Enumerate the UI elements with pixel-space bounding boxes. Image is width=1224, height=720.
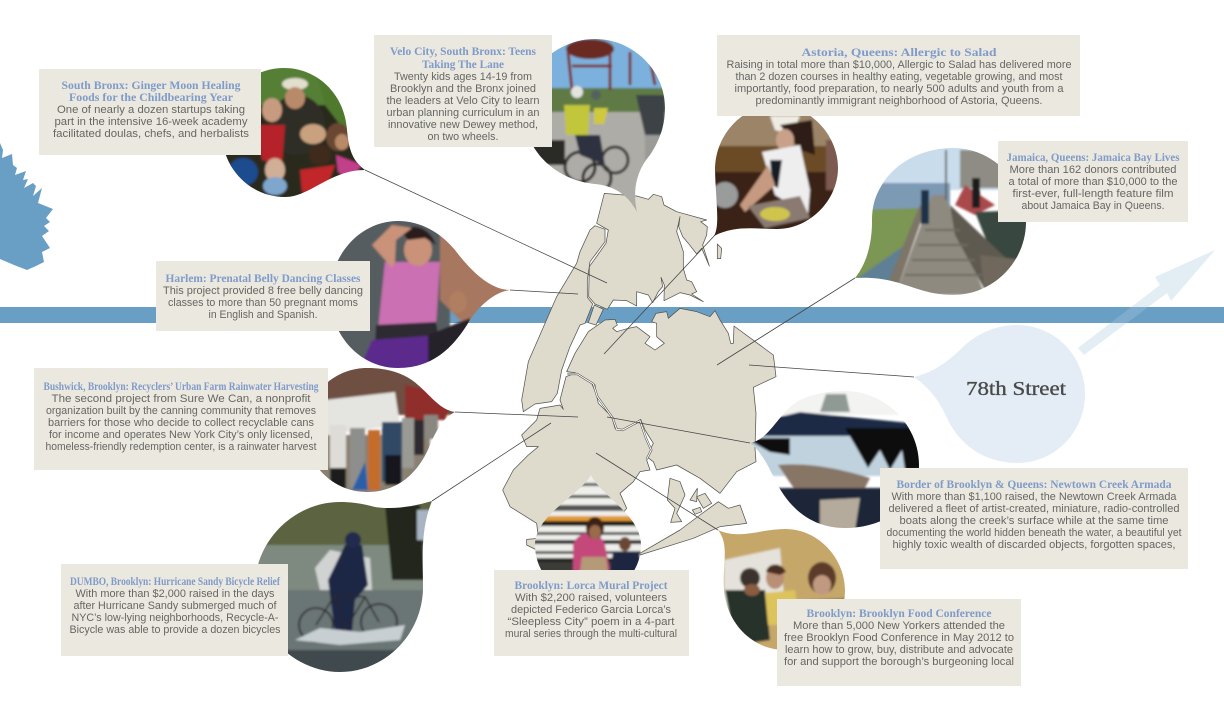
body: Newtown Creek xyxy=(886,491,1182,551)
body: DUMBO: after Hurricane Sandy submerged much of xyxy=(74,600,277,612)
panel: Food Conference xyxy=(715,525,1021,686)
body: Velo City: innovative new Dewey method, xyxy=(388,119,538,131)
heading: Harlem: Harlem: Prenatal Belly Dancing Classes xyxy=(166,273,361,285)
body: Bushwick: for income and operates New York City’s only licensed, xyxy=(49,429,313,441)
heading: Bushwick: Bushwick, Brooklyn: Recyclers’ Urban Farm Rainwater Harvesting xyxy=(44,381,319,393)
body: DUMBO xyxy=(70,588,281,636)
text box: South Bronx xyxy=(39,69,261,155)
body: Jamaica: about Jamaica Bay in Queens. xyxy=(1022,200,1164,212)
panel: Lorca xyxy=(494,470,689,656)
borough: Bronx xyxy=(589,193,709,309)
connector lines xyxy=(365,170,914,530)
body: DUMBO: NYC’s low-lying neighborhoods, Recycle-A- xyxy=(72,612,279,624)
body: Astoria: than 2 dozen courses in healthy eating, vegetable growing, and most xyxy=(736,71,1062,83)
body: Velo City: on two wheels. xyxy=(428,131,498,143)
body: Lorca: “Sleepless City” poem in a 4-part xyxy=(508,616,674,628)
body: Astoria: predominantly immigrant neighborhood of Astoria, Queens. xyxy=(756,95,1042,107)
body: DUMBO: With more than $2,000 raised in the days xyxy=(76,588,275,600)
body: Lorca xyxy=(505,592,677,640)
arrow pointing north-east xyxy=(1078,250,1215,355)
body: Food Conference: for and support the borough’s burgeoning local xyxy=(784,656,1014,668)
callout: 78th Street: 78th Street xyxy=(966,378,1066,400)
body: Food Conference: free Brooklyn Food Conference in May 2012 to xyxy=(784,632,1014,644)
panel: Harlem xyxy=(156,215,515,375)
heading: Food Conference: Brooklyn: Brooklyn Food Conference xyxy=(806,608,992,620)
photo: Brooklyn Food Conference xyxy=(718,529,845,650)
Newtown Creek channel xyxy=(567,374,651,459)
body: Harlem: This project provided 8 free belly dancing xyxy=(163,285,363,297)
heading: South Bronx: South Bronx: Ginger Moon Healing xyxy=(62,80,241,92)
body: South Bronx: One of nearly a dozen startups taking xyxy=(57,104,245,116)
heading: Velo City xyxy=(390,46,537,71)
body: Newtown Creek: delivered a fleet of artist-created, miniature, radio-controlled xyxy=(888,503,1180,515)
heading: Velo City: Velo City, South Bronx: Teens xyxy=(390,46,537,58)
borough: Queens xyxy=(567,308,776,493)
borough: Manhattan xyxy=(522,226,605,412)
photo: DUMBO cyclist in flood xyxy=(258,501,432,672)
heading: Astoria: Astoria, Queens: Allergic to Salad xyxy=(802,47,997,59)
photo: South Bronx group xyxy=(226,68,365,197)
text box: Lorca xyxy=(494,570,689,656)
text box: Velo City xyxy=(374,35,552,147)
body: Bushwick: homeless-friendly redemption center, is a rainwater harvest xyxy=(46,441,316,453)
photo: Velo City cyclists xyxy=(534,39,665,212)
heading: DUMBO: DUMBO, Brooklyn: Hurricane Sandy Bicycle Relief xyxy=(70,576,280,588)
text box: Jamaica xyxy=(998,141,1188,222)
body: Newtown Creek: documenting the world hidden beneath the water, a beautiful yet xyxy=(886,527,1182,539)
text box: Food Conference xyxy=(777,599,1021,686)
text box: Harlem xyxy=(156,261,370,331)
text box: Bushwick xyxy=(34,368,328,470)
photo: Harlem belly dancing xyxy=(338,221,510,368)
body: Astoria: Raising in total more than $10,000, Allergic to Salad has delivered more xyxy=(726,59,1072,71)
body: Velo City xyxy=(386,71,540,143)
text box: DUMBO xyxy=(61,564,288,656)
body: Newtown Creek: boats along the creek’s surface while at the same time xyxy=(900,515,1168,527)
body: Harlem: classes to more than 50 pregnant moms xyxy=(168,297,359,309)
body: Newtown Creek: highly toxic wealth of discarded objects, forgotten spaces, xyxy=(892,539,1176,551)
body: Harlem: in English and Spanish. xyxy=(208,309,318,321)
body: Velo City: the leaders at Velo City to learn xyxy=(386,95,540,107)
body: Velo City: Twenty kids ages 14-19 from xyxy=(394,71,532,83)
Jamaica Bay islands xyxy=(667,244,722,522)
body: Lorca: mural series through the multi-cultural xyxy=(505,628,677,640)
panel: Velo City xyxy=(374,35,675,217)
body: Astoria: importantly, food preparation, to nearly 500 adults and youth from a xyxy=(734,83,1064,95)
Randalls Island xyxy=(588,305,603,325)
panel: Astoria xyxy=(705,35,1080,242)
body: South Bronx xyxy=(53,104,250,140)
body: Bushwick xyxy=(46,393,317,453)
body: Newtown Creek: With more than $1,100 raised, the Newtown Creek Armada xyxy=(892,491,1176,503)
horizontal blue stripe xyxy=(0,307,1224,323)
Rockaway peninsula xyxy=(640,502,747,555)
body: DUMBO: Bicycle was able to provide a dozen bicycles xyxy=(70,624,281,636)
body: Jamaica: first-ever, full-length feature film xyxy=(1012,188,1174,200)
body: Bushwick: barriers for those who decide to collect recyclable cans xyxy=(48,417,315,429)
map of New York City boroughs xyxy=(503,193,776,555)
borough: Brooklyn xyxy=(503,373,652,550)
panel: South Bronx xyxy=(39,68,365,197)
body: Harlem xyxy=(163,285,363,321)
body: Jamaica: More than 162 donors contributed xyxy=(1010,164,1176,176)
photo: Lorca mural xyxy=(535,475,641,570)
text box: Astoria xyxy=(717,35,1080,116)
body: South Bronx: facilitated doulas, chefs, and herbalists xyxy=(53,128,250,140)
panel: DUMBO xyxy=(61,495,440,680)
heading: Jamaica: Jamaica, Queens: Jamaica Bay Lives xyxy=(1006,152,1180,164)
tree silhouette xyxy=(0,143,53,270)
panel: Bushwick xyxy=(34,365,460,495)
body: Bushwick: The second project from Sure We Can, a nonprofit xyxy=(52,393,310,405)
body: Velo City: Brooklyn and the Bronx joined xyxy=(390,83,536,95)
body: Velo City: urban planning curriculum in an xyxy=(386,107,540,119)
panel: Newtown Creek xyxy=(745,385,1188,569)
body: Food Conference: More than 5,000 New Yorkers attended the xyxy=(793,620,1005,632)
heading: Newtown Creek: Border of Brooklyn & Queens: Newtown Creek Armada xyxy=(896,479,1172,491)
body: Astoria xyxy=(726,59,1072,107)
body: Food Conference: learn how to grow, buy, distribute and advocate xyxy=(785,644,1013,656)
body: Food Conference xyxy=(784,620,1014,668)
body: Jamaica: a total of more than $10,000 to the xyxy=(1008,176,1178,188)
heading: South Bronx: Foods for the Childbearing Year xyxy=(69,92,233,104)
text box: Newtown Creek xyxy=(880,468,1188,569)
photo: Bushwick group xyxy=(320,368,455,492)
photo: Astoria girl cooking xyxy=(714,116,838,236)
panel: Jamaica xyxy=(850,140,1188,295)
photo: Jamaica Bay boardwalk xyxy=(855,148,1026,295)
body: South Bronx: part in the intensive 16-week academy xyxy=(54,116,248,128)
heading: South Bronx xyxy=(62,80,241,104)
heading: Lorca: Brooklyn: Lorca Mural Project xyxy=(514,580,668,592)
photo: Newtown Creek boats xyxy=(750,391,919,528)
heading: Velo City: Taking The Lane xyxy=(422,59,504,71)
body: Lorca: With $2,200 raised, volunteers xyxy=(515,592,668,604)
body: Jamaica xyxy=(1008,164,1178,212)
callout: 78th Street xyxy=(914,325,1085,463)
body: Lorca: depicted Federico Garcia Lorca’s xyxy=(511,604,672,616)
body: Bushwick: organization built by the canning community that removes xyxy=(46,405,317,417)
